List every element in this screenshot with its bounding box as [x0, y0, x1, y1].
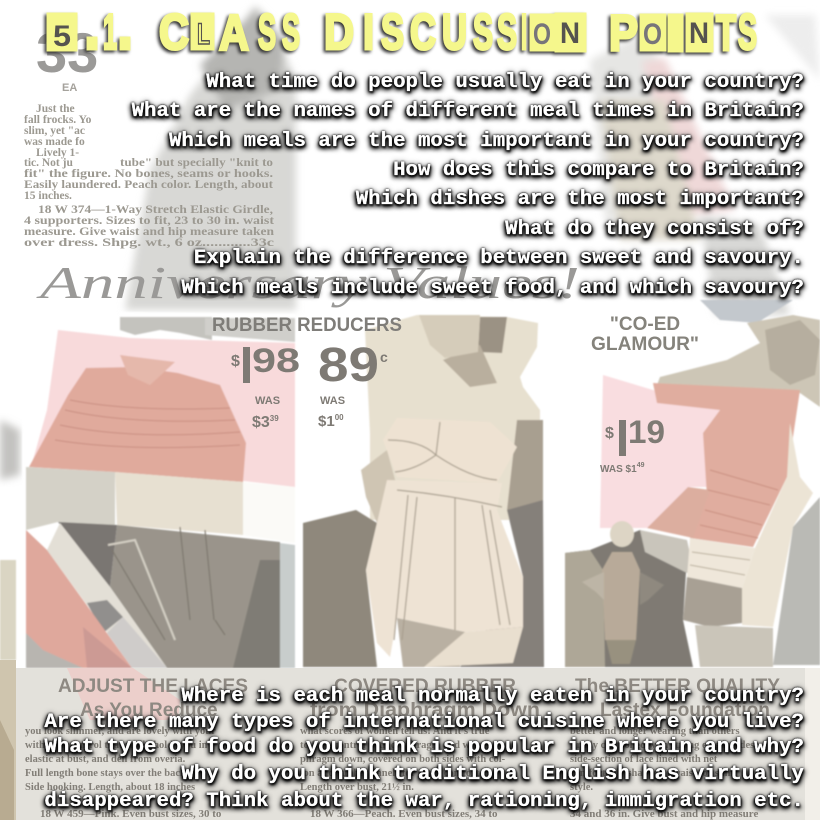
catalogue text panel: tic. Not ju	[24, 157, 73, 169]
price: 1.19: WAS $1	[600, 464, 637, 475]
question list: top	[126, 68, 808, 304]
catalogue text panel: Just the	[36, 103, 75, 115]
price: 1.19: $	[605, 425, 614, 442]
title: 5.1. Class Discussion Points: T	[716, 5, 736, 61]
catalogue text panel: fit" the figure. No bones, seams or hooks.	[24, 168, 273, 180]
price: 1.19: 19	[628, 414, 665, 450]
catalogue text panel: tube" but specially "knit to	[120, 157, 273, 169]
title: 5.1. Class Discussion Points: 1	[103, 4, 117, 60]
title: 5.1. Class Discussion Points: S	[381, 4, 404, 60]
question list: bottom: Where is each meal normally eaten in your country?	[181, 685, 804, 708]
bottom catalogue strip: 18 W 366—Peach. Even bust sizes, 34 to	[310, 808, 498, 820]
catalogue text panel: EA	[62, 82, 77, 94]
bottom catalogue strip: Length over bust, 21½ in.	[300, 782, 414, 793]
title: 5.1. Class Discussion Points: A	[219, 5, 249, 61]
heading: Co-Ed Glamour: "CO-ED	[610, 314, 680, 335]
bottom catalogue strip: As You Reduce	[80, 700, 218, 721]
question list: top: How does this compare to Britain?	[393, 159, 804, 182]
bottom catalogue strip: Lastex Foundation	[600, 700, 770, 721]
script heading: Anniversary Values: Anniversary Values!	[36, 257, 580, 308]
bottom catalogue strip: from Diaphragm Down	[310, 700, 540, 721]
question list: bottom: Why do you think traditional English has virtually	[181, 763, 804, 786]
catalogue text panel: measure. Give waist and hip measure taken	[24, 226, 275, 238]
bottom catalogue strip: The BETTER QUALITY	[575, 676, 780, 697]
title: 5.1. Class Discussion Points: L	[197, 18, 210, 51]
title: 5.1. Class Discussion Points: N	[560, 17, 580, 50]
question list: top: Explain the difference between sweet and savoury.	[194, 247, 804, 270]
title: 5.1. Class Discussion Points: S	[473, 4, 493, 60]
question list: top: Which meals are the most important in your country?	[169, 130, 804, 153]
catalogue text panel: Lively 1-	[36, 147, 79, 159]
question list: top: Which dishes are the most important?	[356, 188, 804, 211]
torn grey paper and pale stripes behind the header	[125, 5, 820, 315]
bottom catalogue strip: COVERED RUBBER	[334, 676, 516, 697]
catalogue text panel: fall frocks. Yo	[24, 114, 92, 126]
right model panel	[565, 300, 820, 667]
question list: bottom: disappeared? Think about the war, rationing, immigration etc.	[44, 790, 804, 813]
bottom catalogue strip: elastic at bust, and dell from overia.	[25, 754, 186, 765]
title: 5.1. Class Discussion Points: I	[521, 4, 527, 60]
centre model panel	[303, 315, 544, 667]
bottom catalogue strip: phragm down, covered on both sides with col-	[300, 754, 506, 765]
bottom catalogue strip: style.	[570, 782, 593, 793]
price: 1.19: 49	[637, 462, 645, 469]
price: 89 cents: $1	[318, 413, 335, 430]
heading: Co-Ed Glamour: GLAMOUR"	[591, 334, 699, 355]
title: 5.1. Class Discussion Points	[42, 4, 758, 61]
question list: top: What do they consist of?	[505, 218, 804, 241]
bottom catalogue strip: 34 and 36 in. Give bust and hip measure	[570, 808, 758, 820]
title: 5.1. Class Discussion Points: S	[738, 4, 757, 60]
bottom catalogue strip: you look slimmer, and are lovely with your	[25, 726, 216, 737]
price: 1.98: 39	[270, 414, 279, 423]
title: 5.1. Class Discussion Points: S	[258, 4, 276, 60]
catalogue text panel: Easily laundered. Peach color. Length, about	[24, 179, 273, 191]
bottom catalogue strip: ADJUST THE LACES	[58, 676, 248, 697]
question list: top: What are the names of different meal times in Britain?	[132, 100, 804, 123]
title: 5.1. Class Discussion Points: N	[689, 17, 709, 50]
title: 5.1. Class Discussion Points: O	[643, 18, 662, 51]
title: 5.1. Class Discussion Points: D	[324, 4, 354, 60]
price: 1.98: 98	[252, 342, 300, 380]
heading: Co-Ed Glamour	[591, 314, 699, 355]
question list: bottom: Are there many types of international cuisine where you live?	[44, 711, 804, 734]
title: 5.1. Class Discussion Points: S	[497, 4, 517, 60]
bottom catalogue strip: side-section of lace lined with net	[570, 754, 718, 765]
title: 5.1. Class Discussion Points: P	[609, 5, 638, 61]
question list: bottom	[39, 682, 808, 817]
title: 5.1. Class Discussion Points: C	[410, 4, 436, 60]
bottom catalogue strip: comfortably shaped at waist for slim	[570, 768, 734, 779]
catalogue text panel: 18 W 374—1-Way Stretch Elastic Girdle,	[38, 204, 273, 216]
catalogue text panel: 33	[36, 21, 98, 84]
catalogue text panel: 4 supporters. Sizes to fit, 23 to 30 in. waist	[24, 215, 274, 227]
question list: top: Which meals include sweet food, and which savoury?	[181, 277, 804, 300]
heading: Rubber Reducers: RUBBER REDUCERS	[212, 315, 402, 336]
bottom catalogue strip: better and longer wearing than others	[570, 726, 740, 737]
price: 1.98: $3	[252, 414, 270, 431]
title: 5.1. Class Discussion Points: U	[442, 4, 467, 60]
catalogue text panel	[24, 21, 275, 249]
bottom catalogue strip: ton and rubber panels for extra comfort	[300, 768, 480, 779]
bottom catalogue strip: with firm control that really holds you in	[25, 740, 208, 751]
price: 1.98	[231, 342, 300, 431]
price: 1.98: WAS	[255, 395, 280, 407]
price: 89 cents: 00	[335, 413, 344, 422]
bottom catalogue strip: what scores of women tell us! And it's true	[300, 726, 490, 737]
title: 5.1. Class Discussion Points: I	[363, 4, 374, 60]
bottom catalogue strip: 18 W 459—Pink. Even bust sizes, 30 to	[40, 808, 222, 820]
title: 5.1. Class Discussion Points: 5	[53, 20, 71, 53]
title: 5.1. Class Discussion Points: C	[159, 4, 189, 60]
question list: top: What time do people usually eat in your country?	[206, 71, 804, 94]
catalogue text panel: 15 inches.	[24, 190, 72, 202]
bottom catalogue strip: Side hooking. Length, about 18 inches	[25, 782, 195, 793]
price: 1.98: $	[231, 353, 240, 370]
bottom catalogue strip: Full length bone stays over the back	[25, 768, 186, 779]
bottom catalogue strip	[0, 660, 820, 820]
bottom catalogue strip: firmly controlled with strong elastic sides	[570, 740, 754, 751]
price: 89 cents: c	[380, 349, 388, 365]
catalogue text panel: slim, yet "ac	[24, 125, 85, 137]
catalogue text panel: over dress. Shpg. wt., 6 oz............33c	[24, 237, 274, 249]
question list: bottom: What type of food do you think is popular in Britain and why?	[44, 736, 804, 759]
price: 1.19	[600, 414, 665, 475]
catalogue text panel: was made fo	[24, 136, 85, 148]
price: 89 cents: WAS	[320, 395, 345, 407]
bottom catalogue strip: to firm control with diaphragm and waist	[300, 740, 486, 751]
left model panel	[0, 312, 295, 668]
title: 5.1. Class Discussion Points: O	[533, 18, 551, 51]
title: 5.1. Class Discussion Points: S	[282, 4, 300, 60]
price: 89 cents	[318, 339, 388, 430]
price: 89 cents: 89	[318, 339, 379, 392]
